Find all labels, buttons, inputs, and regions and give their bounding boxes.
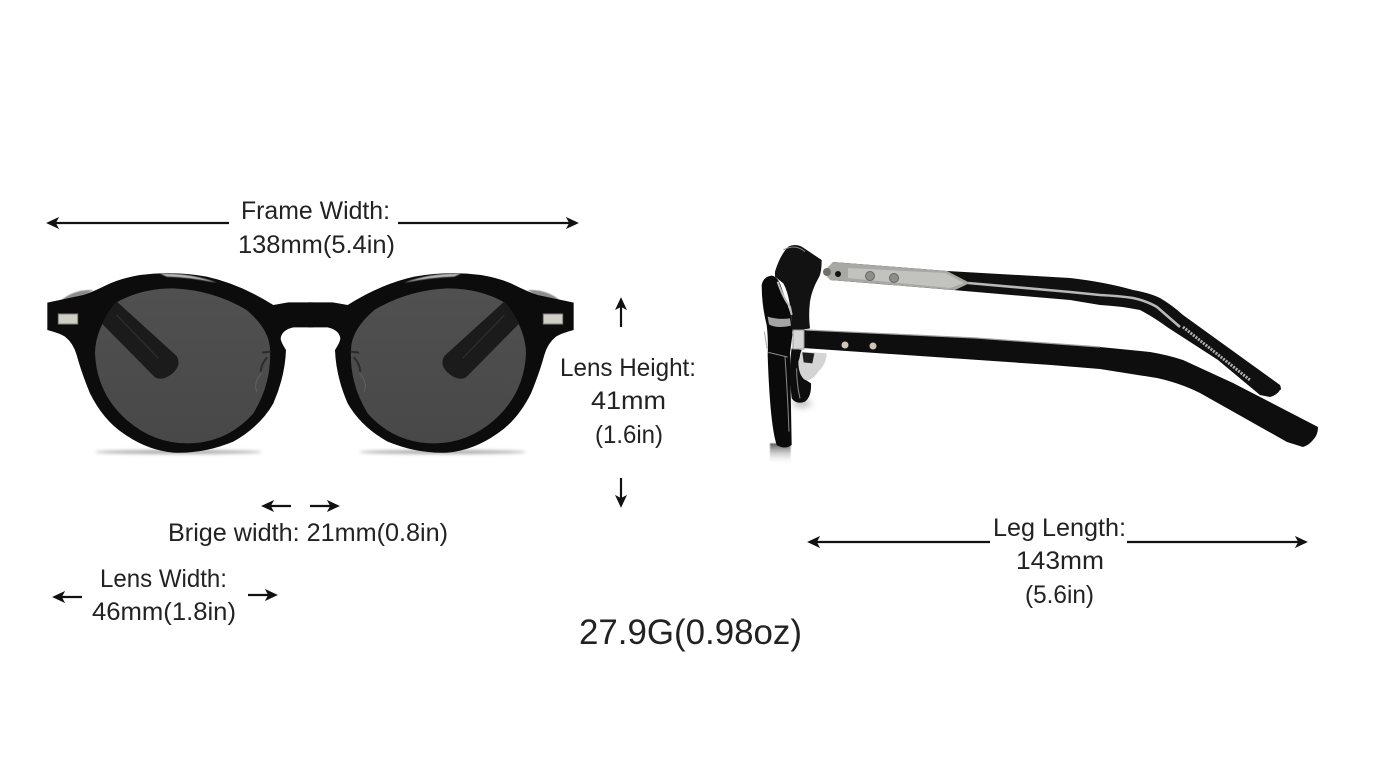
bridge width arrows [265,505,336,507]
lens height label: 41mm [591,387,666,415]
near temple arm [803,330,1318,447]
rims and nose pad [762,245,827,465]
leg length label [993,514,1126,609]
far temple arm [830,262,1281,397]
lens height label: (1.6in) [595,421,663,449]
bridge width label: Brige width: 21mm(0.8in) [168,519,448,547]
lens width label: 46mm(1.8in) [92,598,236,626]
front view of sunglasses [47,273,574,454]
leg length arrows [811,541,1304,543]
lens height label [560,354,696,449]
leg length label: (5.6in) [1025,581,1094,609]
lens width label [92,565,236,626]
side view of sunglasses [762,245,1318,465]
lens width label: Lens Width: [100,565,227,593]
frame width label [238,197,395,259]
leg length label: 143mm [1016,547,1104,575]
weight label: 27.9G(0.98oz) [579,613,802,652]
leg length label: Leg Length: [993,514,1126,542]
lens height arrows [620,301,622,504]
frame width arrows [50,222,575,224]
frame width label: 138mm(5.4in) [238,231,395,259]
frame width label: Frame Width: [241,197,390,225]
lens height label: Lens Height: [560,354,696,382]
lens width arrows [56,595,274,597]
